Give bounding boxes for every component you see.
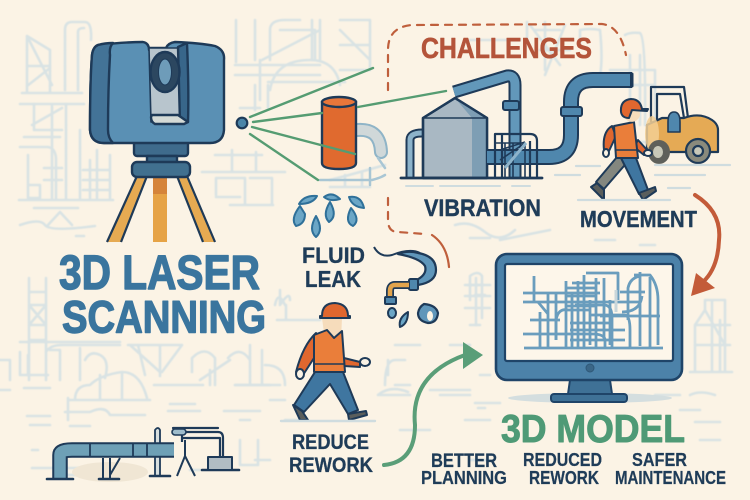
- heading: 3D model: 3D MODEL: [501, 408, 685, 451]
- title: 3D laser scanning: 3D LASER: [59, 247, 260, 300]
- pipe network on screen: [523, 272, 663, 348]
- label: reduce rework: [289, 431, 373, 477]
- benefit: better planning: [421, 451, 507, 488]
- benefit: reduced rework: [523, 449, 602, 488]
- benefit: better planning: BETTER: [431, 451, 497, 472]
- pipe behind cylinder: [320, 130, 385, 185]
- label: reduce rework: REWORK: [289, 454, 373, 477]
- benefit: safer maintenance: SAFER: [632, 449, 687, 470]
- orange cylinder obstruction: [322, 97, 356, 169]
- benefit: safer maintenance: MAINTENANCE: [615, 467, 726, 488]
- dashed challenges outline: [388, 24, 626, 267]
- green laser beams: [250, 68, 446, 180]
- worker: reduce rework: [293, 303, 370, 420]
- leaking faucet: [374, 247, 438, 327]
- title: 3D laser scanning: SCANNING: [62, 292, 266, 342]
- scanner tripod: [107, 176, 215, 242]
- fluid droplets spray: [294, 194, 364, 237]
- bottom-left pipe assembly: [47, 428, 239, 482]
- laser scanner: [90, 42, 224, 177]
- label: movement: MOVEMENT: [580, 206, 697, 232]
- arrow: challenges to model: [691, 195, 719, 296]
- benefit: reduced rework: REDUCED: [523, 449, 602, 470]
- forklift: [647, 87, 718, 163]
- ground line under worker: [281, 420, 375, 422]
- vibration: tank and pipework: [401, 74, 632, 186]
- walking worker: movement: [591, 99, 656, 200]
- ground dashes near worker: [555, 165, 730, 200]
- label: fluid leak: LEAK: [305, 266, 361, 292]
- laser emitter dot: [237, 118, 247, 128]
- heading: challenges: CHALLENGES: [421, 33, 592, 65]
- label: fluid leak: [302, 243, 365, 292]
- monitor with 3D model: [496, 254, 682, 403]
- forklift blurred front wheel: [645, 116, 670, 164]
- label: vibration: VIBRATION: [424, 195, 541, 222]
- label: reduce rework: REDUCE: [292, 431, 369, 454]
- benefit: better planning: PLANNING: [421, 467, 507, 488]
- benefit: safer maintenance: [615, 449, 726, 488]
- arrow: to 3d model: [384, 342, 483, 465]
- label: fluid leak: FLUID: [302, 243, 365, 268]
- title: 3D laser scanning: [59, 247, 266, 342]
- benefit: reduced rework: REWORK: [529, 467, 600, 488]
